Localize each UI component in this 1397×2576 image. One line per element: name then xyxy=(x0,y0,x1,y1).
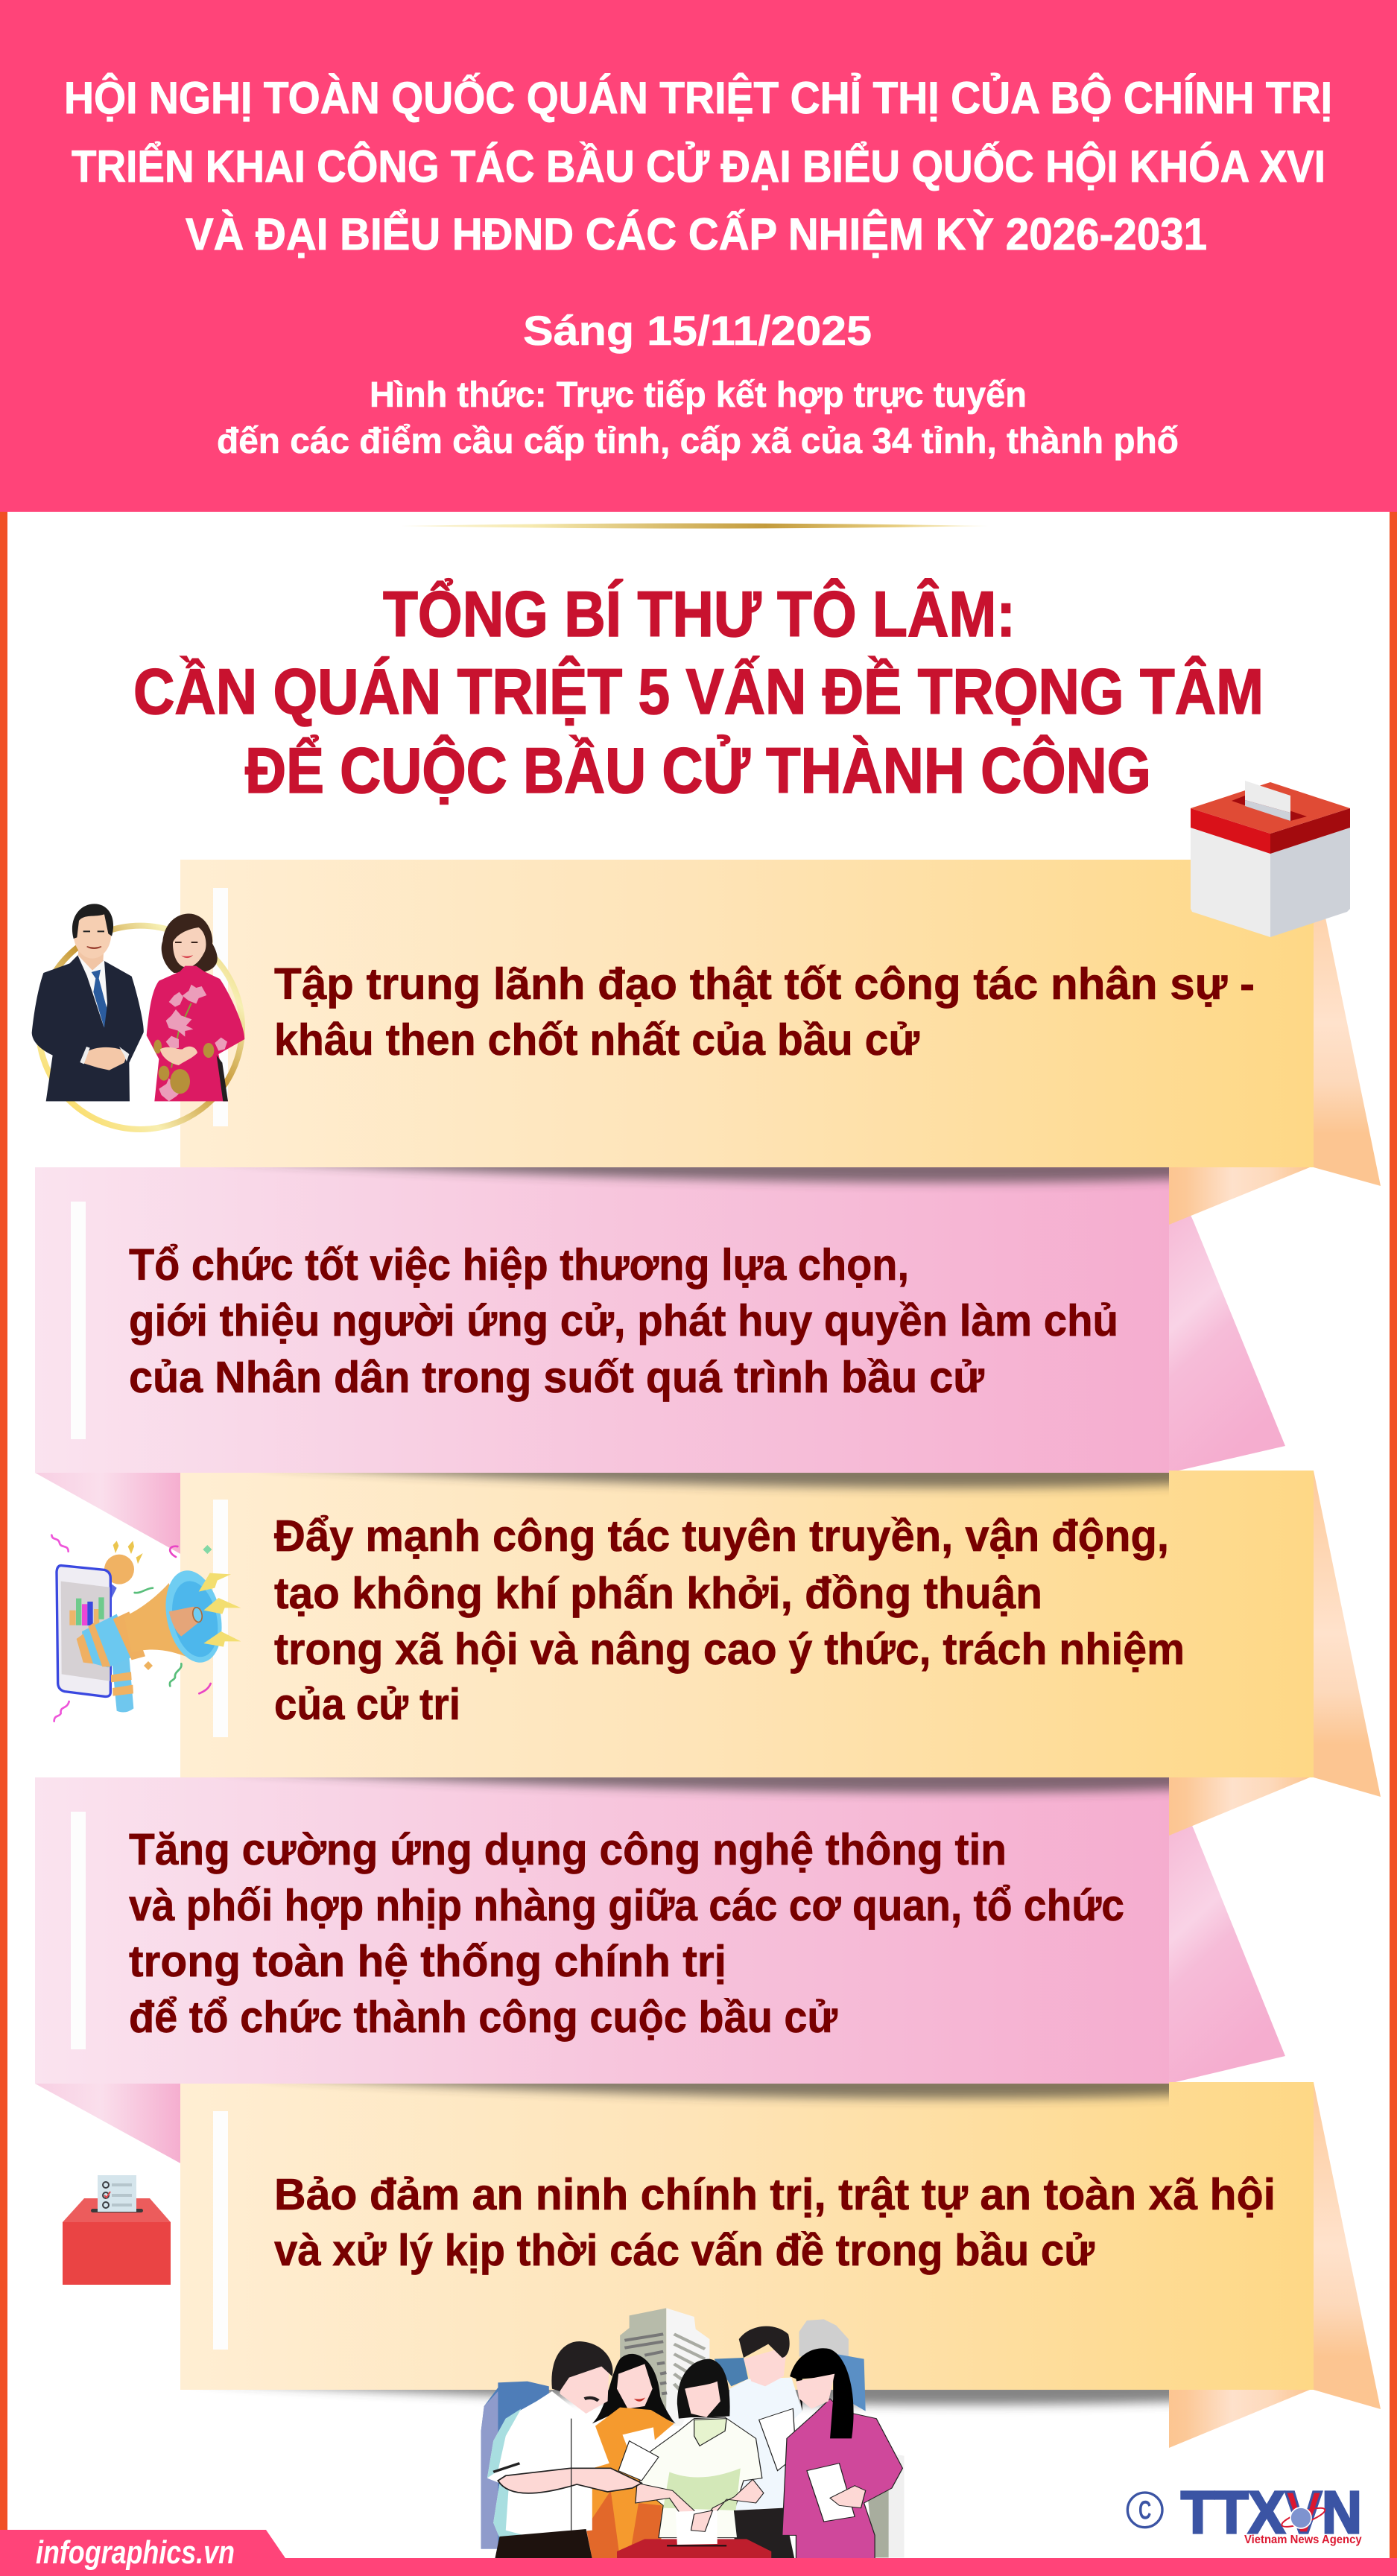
woman xyxy=(147,913,244,1101)
icon: couple with gold ring xyxy=(32,904,244,1129)
item 1 text: khâu then chốt nhất của bầu cử xyxy=(274,1015,919,1065)
item 4 text: trong toàn hệ thống chính trị xyxy=(129,1937,726,1986)
item 1 text: Tập trung lãnh đạo thật tốt công tác nhân sự - xyxy=(274,959,1255,1009)
item 5 text: và xử lý kịp thời các vấn đề trong bầu cử xyxy=(274,2226,1095,2275)
panel: item 5 xyxy=(180,2082,1314,2390)
ballot box xyxy=(617,2510,771,2560)
panel: item 4 xyxy=(35,1777,1169,2084)
item 5 text xyxy=(274,2170,1276,2275)
sparks and confetti xyxy=(51,1535,241,1722)
bulb xyxy=(104,1541,143,1598)
panel: item 2 xyxy=(35,1167,1169,1473)
header title: HỘI NGHỊ TOÀN QUỐC QUÁN TRIỆT CHỈ THỊ CỦA BỘ CHÍNH TRỊ xyxy=(64,73,1332,123)
item 3 text: trong xã hội và nâng cao ý thức, trách nhiệm xyxy=(274,1625,1185,1674)
panel: item 3 xyxy=(180,1471,1314,1777)
format note xyxy=(217,375,1179,461)
gold divider xyxy=(401,523,989,529)
item 3 text xyxy=(274,1511,1185,1729)
copyright mark: C xyxy=(1138,2496,1151,2525)
item 5 text: Bảo đảm an ninh chính trị, trật tự an toàn xã hội xyxy=(274,2170,1276,2219)
header title xyxy=(64,73,1332,259)
panel: item 1 xyxy=(180,860,1314,1167)
copyright mark xyxy=(1127,2493,1162,2528)
pink left folds xyxy=(35,1473,182,2164)
panel: header xyxy=(0,0,1397,512)
date: Sáng 15/11/2025 xyxy=(523,307,872,354)
item 3 text: của cử tri xyxy=(274,1680,460,1729)
item 3 text: tạo không khí phấn khởi, đồng thuận xyxy=(274,1569,1042,1618)
icon: ballot box top right xyxy=(1191,781,1350,937)
main title: ĐỂ CUỘC BẦU CỬ THÀNH CÔNG xyxy=(245,735,1151,807)
man at back xyxy=(728,2326,802,2559)
main title: CẦN QUÁN TRIỆT 5 VẤN ĐỀ TRỌNG TÂM xyxy=(133,656,1264,728)
item 2 text: giới thiệu người ứng cử, phát huy quyền làm chủ xyxy=(129,1296,1118,1345)
woman in green shirt xyxy=(636,2359,764,2538)
band shadows xyxy=(186,1158,1192,2405)
illustration: voters and buildings xyxy=(481,2308,905,2560)
buildings xyxy=(481,2308,905,2557)
agency name: Vietnam News Agency xyxy=(1244,2534,1362,2546)
item 2 text xyxy=(129,1240,1118,1402)
item 4 text: và phối hợp nhịp nhàng giữa các cơ quan, tổ chức xyxy=(129,1881,1124,1930)
main title xyxy=(133,579,1264,807)
item 4 text xyxy=(129,1825,1124,2042)
item 4 text: Tăng cường ứng dụng công nghệ thông tin xyxy=(129,1825,1007,1874)
item 3 text: Đẩy mạnh công tác tuyên truyền, vận động, xyxy=(274,1511,1169,1561)
side border left xyxy=(0,512,7,2568)
man in white shirt xyxy=(487,2341,659,2559)
phone xyxy=(57,1566,110,1696)
item 4 text: để tổ chức thành công cuộc bầu cử xyxy=(129,1993,837,2042)
ribbon tails: pink xyxy=(1169,1167,1285,2084)
ribbon tails: yellow xyxy=(1169,860,1381,2448)
man xyxy=(32,904,144,1101)
format note: đến các điểm cầu cấp tỉnh, cấp xã của 34 tỉnh, thành phố xyxy=(217,422,1179,461)
footer tab xyxy=(0,2530,298,2576)
item 1 text xyxy=(274,959,1255,1065)
woman in magenta xyxy=(782,2348,902,2559)
item 2 text: Tổ chức tốt việc hiệp thương lựa chọn, xyxy=(129,1240,909,1289)
item 2 text: của Nhân dân trong suốt quá trình bầu cử xyxy=(129,1353,984,1402)
format note: Hình thức: Trực tiếp kết hợp trực tuyến xyxy=(370,375,1027,415)
wordmark: TTXVN xyxy=(1181,2479,1362,2545)
globe xyxy=(1280,2504,1327,2531)
icon: megaphone and phone xyxy=(51,1535,241,1722)
footer bar xyxy=(0,2558,1397,2576)
header title: VÀ ĐẠI BIỂU HĐND CÁC CẤP NHIỆM KỲ 2026-2031 xyxy=(186,209,1207,259)
megaphone xyxy=(77,1565,229,1713)
side border right xyxy=(1390,512,1397,2568)
logo: copyright TTXVN xyxy=(1127,2479,1362,2546)
site name: infographics.vn xyxy=(36,2534,235,2571)
main title: TỔNG BÍ THƯ TÔ LÂM: xyxy=(383,579,1016,650)
icon: red ballot box xyxy=(63,2175,171,2285)
woman in orange xyxy=(586,2354,676,2559)
